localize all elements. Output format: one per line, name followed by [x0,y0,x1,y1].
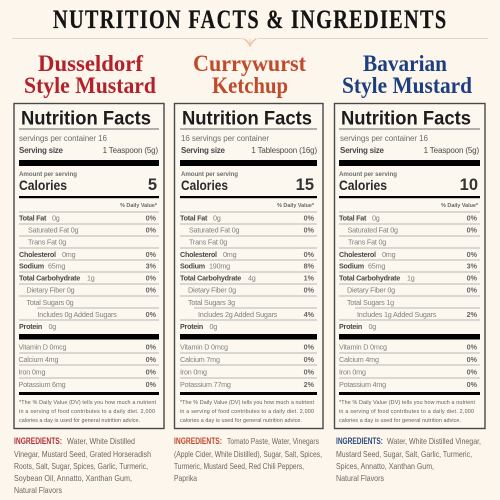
nutrient rows: Saturated Fat 0g [28,226,79,234]
nutrient rows: Total Sugars 1g [347,298,394,307]
nutrient rows: 0% [146,310,157,319]
nutrient rows: Protein [339,322,362,331]
vitamins and minerals: Potassium 6mg [18,380,66,389]
panel: Dusseldorf nutrition label [14,104,164,428]
nutrient rows: 0g [213,214,221,222]
vitamins and minerals: 0% [467,343,478,352]
nutrient rows: Includes 2g Added Sugars [198,310,278,319]
ingredients: Dusseldorf: Soybean Oil, Annatto, Xanthan Gum, [14,473,132,483]
nutrient rows: 0% [304,286,315,295]
nutrient rows: Includes 1g Added Sugars [357,310,437,319]
serving information [19,129,159,166]
nutrient rows: 0% [467,250,478,259]
nutrient rows: 0g [48,322,56,331]
nutrient rows: 0% [304,214,315,222]
nutrient rows: 65mg [368,262,385,270]
nutrient rows: 4g [248,274,256,283]
panel: Currywurst Ketchup nutrition label [174,104,323,428]
serving information: servings per container 16 [340,134,429,143]
ingredients: Bavarian [336,436,481,483]
nutrient rows: 1g [87,274,95,283]
calories [19,171,159,209]
calories: Amount per serving [181,171,238,178]
calories: 15 [296,176,314,194]
ingredients: Dusseldorf: Water, White Distilled [67,436,135,446]
vitamins and minerals [18,343,159,395]
nutrient rows: Saturated Fat 0g [189,226,240,234]
calories: Amount per serving [19,171,77,178]
footnote: calories a day is used for general nutrition advice. [19,418,140,424]
nutrient rows: Saturated Fat 0g [348,226,398,234]
nutrient rows: 3% [146,262,157,270]
nutrient rows: 0g [372,214,380,222]
vitamins and minerals: Vitamin D 0mcg [18,343,66,352]
calories: Calories [181,177,228,193]
vitamins and minerals: Calcium 4mg [18,355,58,364]
nutrient rows: 65mg [48,262,65,270]
nutrient rows: Dietary Fiber 0g [188,286,236,295]
nutrient rows: 0g [52,214,60,222]
nutrient rows: 0% [146,274,157,283]
serving information: 16 servings per container [181,134,269,143]
ingredients: Currywurst Ketchup: Tomato Paste, Water, Vinegars [227,436,319,446]
vitamins and minerals: Iron 0mg [180,368,207,377]
nutrient rows: Total Sugars 0g [26,298,74,307]
nutrient rows: Dietary Fiber 0g [26,286,75,295]
nutrient rows: Protein [19,322,42,331]
nutrient rows: Cholesterol [19,250,56,259]
nutrient rows [19,212,159,340]
calories: Calories [339,177,387,193]
heading: Dusseldorf Style Mustard [24,51,156,99]
nutrient rows: Trans Fat 0g [189,238,227,246]
serving information: Serving size [19,146,64,155]
nutrient rows: 0% [467,226,478,234]
footnote: in a serving of food contributes to a daily diet. 2,000 [19,409,155,415]
vitamins and minerals [339,343,480,395]
nutrient rows: 0% [146,250,157,259]
nutrient rows: 3% [467,262,478,270]
serving information: servings per container 16 [19,134,108,143]
ingredients: Dusseldorf: Natural Flavors [14,485,62,495]
nutrient rows: Total Fat [339,214,367,222]
serving information: 1 Teaspoon (5g) [424,146,479,155]
nutrient rows: Total Carbohydrate [180,274,241,283]
ingredients: Currywurst Ketchup: (Apple Cider, White Distilled), Sugar, Salt, Spices, [174,449,322,459]
footnote [339,400,476,424]
heading: Bavarian Style Mustard [342,51,472,99]
vitamins and minerals: 0% [304,343,315,352]
nutrient rows: 0mg [62,250,76,259]
label heading: Nutrition Facts [21,108,151,130]
calories [339,171,480,209]
calories: % Daily Value* [277,203,315,209]
serving information: 1 Tablespoon (16g) [251,146,317,155]
footnote [19,400,156,424]
ingredients: Bavarian: Water, White Distilled Vinegar, [387,436,481,446]
ingredients: Currywurst Ketchup: INGREDIENTS: [174,436,222,446]
vitamins and minerals: Vitamin D 0mcg [180,343,228,352]
nutrient rows: 0% [146,286,157,295]
heading: Currywurst Ketchup: Ketchup [212,73,288,99]
footnote: in a serving of food contributes to a daily diet. 2,000 [339,409,474,415]
label heading: Nutrition Facts [182,108,312,130]
heading: Currywurst Ketchup [193,51,306,99]
vitamins and minerals: Iron 0mg [18,368,45,377]
nutrient rows: 0% [467,274,478,283]
footnote: calories a day is used for general nutrition advice. [180,418,302,424]
ingredients: Bavarian: INGREDIENTS: [336,436,383,446]
nutrient rows [180,212,317,340]
ingredients: Bavarian: Mustard Seed, Sugar, Salt, Garlic, Turmeric, [336,449,472,459]
ingredients: Currywurst Ketchup: Turmeric, Mustard Seed, Red Chili Peppers, [174,461,304,471]
heading: Dusseldorf Style Mustard: Style Mustard [24,73,156,99]
serving information: 1 Teaspoon (5g) [103,146,158,155]
nutrient rows: Total Carbohydrate [339,274,400,283]
nutrient rows: 0% [467,214,478,222]
vitamins and minerals [180,343,317,395]
nutrient rows: 0% [146,226,157,234]
heading: Bavarian Style Mustard: Style Mustard [342,73,472,99]
vitamins and minerals: Potassium 77mg [180,380,231,389]
nutrient rows: 1% [304,274,315,283]
vitamins and minerals: 0% [467,355,478,364]
nutrient rows: Sodium [180,262,205,270]
ingredients: Dusseldorf: INGREDIENTS: [14,436,62,446]
vitamins and minerals: Potassium 4mg [339,380,386,389]
calories: % Daily Value* [120,203,158,209]
vitamins and minerals: Calcium 4mg [339,355,379,364]
title rule with ornament [12,38,488,46]
nutrient rows: Total Fat [180,214,208,222]
nutrient rows: 0mg [223,250,237,259]
ingredients: Currywurst Ketchup [174,436,322,483]
nutrient rows: Sodium [19,262,44,270]
footnote: in a serving of food contributes to a daily diet. 2,000 [180,409,314,415]
nutrient rows: Sodium [339,262,364,270]
nutrient rows: 0% [146,214,157,222]
ingredients: Bavarian: Spices, Annatto, Xanthan Gum, [336,461,434,471]
footnote: *The % Daily Value (DV) tells you how much a nutrient [19,400,156,406]
footnote: *The % Daily Value (DV) tells you how much a nutrient [339,400,476,406]
title: NUTRITION FACTS & INGREDIENTS [53,6,446,35]
nutrient rows: Total Fat [19,214,47,222]
heading: Dusseldorf Style Mustard: Dusseldorf [38,51,144,77]
nutrient rows: 0mg [382,250,396,259]
vitamins and minerals: 2% [304,380,315,389]
heading: Bavarian Style Mustard: Bavarian [363,51,447,77]
nutrient rows: 0g [210,322,217,331]
nutrient rows: Protein [180,322,203,331]
ingredients: Dusseldorf: Vinegar, Mustard Seed, Grated Horseradish [14,449,151,459]
vitamins and minerals: 0% [467,380,478,389]
nutrient rows: 4% [304,310,315,319]
nutrient rows: 8% [304,262,315,270]
calories: Calories [19,177,67,193]
vitamins and minerals: 0% [304,368,315,377]
nutrient rows: 0% [304,226,315,234]
nutrient rows: Trans Fat 0g [348,238,386,246]
vitamins and minerals: 0% [467,368,478,377]
calories: % Daily Value* [441,203,479,209]
vitamins and minerals: 0% [146,368,157,377]
calories: 10 [460,176,478,194]
vitamins and minerals: Iron 0mg [339,368,366,377]
serving information: Serving size [181,146,226,155]
footnote: *The % Daily Value (DV) tells you how much a nutrient [180,400,314,406]
nutrient rows: Dietary Fiber 0g [347,286,395,295]
heading: Currywurst Ketchup: Currywurst [193,51,306,77]
nutrient rows: Cholesterol [180,250,217,259]
label heading: Nutrition Facts [341,108,471,130]
ingredients: Bavarian: Natural Flavors [336,473,384,483]
calories [180,171,317,209]
footnote: calories a day is used for general nutrition advice. [339,418,461,424]
nutrient rows: Cholesterol [339,250,376,259]
vitamins and minerals: 0% [146,343,157,352]
serving information [339,129,480,166]
nutrient rows: 0% [304,250,315,259]
serving information: Serving size [340,146,385,155]
nutrient rows [339,212,480,340]
ingredients: Dusseldorf: Roots, Salt, Sugar, Spices, Garlic, Turmeric, [14,461,148,471]
panel: Bavarian nutrition label [334,104,485,428]
footnote [180,400,314,424]
nutrient rows: 0% [467,286,478,295]
ingredients: Dusseldorf [14,436,151,495]
nutrient rows: 190mg [209,262,230,270]
nutrient rows: Trans Fat 0g [28,238,66,246]
nutrient rows: Total Sugars 3g [188,298,235,307]
nutrient rows: Includes 0g Added Sugars [38,310,117,319]
vitamins and minerals: Vitamin D 0mcg [339,343,387,352]
calories: 5 [148,176,157,194]
vitamins and minerals: 0% [146,355,157,364]
serving information [180,129,317,166]
nutrient rows: 2% [467,310,478,319]
vitamins and minerals: Calcium 7mg [180,355,220,364]
nutrient rows: 0g [368,322,376,331]
nutrient rows: Total Carbohydrate [19,274,80,283]
calories: Amount per serving [339,171,397,178]
vitamins and minerals: 0% [304,355,315,364]
ingredients: Currywurst Ketchup: Paprika [174,473,197,483]
nutrient rows: 1g [407,274,415,283]
vitamins and minerals: 0% [146,380,157,389]
